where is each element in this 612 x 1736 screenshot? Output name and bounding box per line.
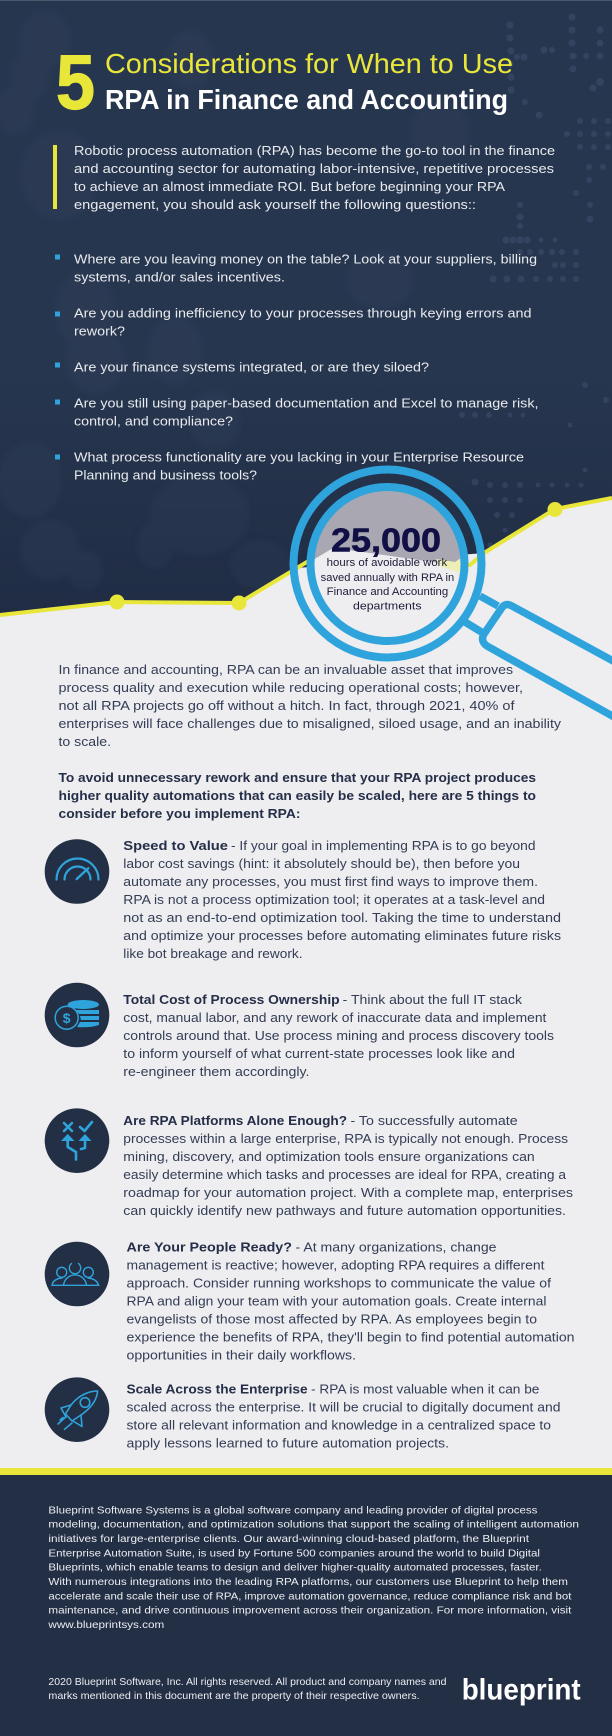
- item 4 text: Are Your People Ready?: [126, 1240, 292, 1255]
- stat caption: [321, 557, 454, 612]
- body paragraph: enterprises will face challenges due to misaligned, siloed usage, and an inability: [58, 716, 561, 731]
- intro paragraph: Robotic process automation (RPA) has become the go-to tool in the finance: [74, 143, 555, 158]
- bold lead-in paragraph: higher quality automations that can easily be scaled, here are 5 things to: [58, 788, 536, 803]
- item 5 text: [126, 1382, 560, 1451]
- intro accent bar: [53, 145, 57, 209]
- company description: Blueprint Software Systems is a global software company and leading provider of digital process: [48, 1504, 537, 1516]
- lens rings: [294, 470, 482, 658]
- item 5 text: apply lessons learned to future automation projects.: [126, 1436, 449, 1451]
- bullet 2: rework?: [74, 323, 125, 338]
- icon: decision arrows: [45, 1108, 109, 1173]
- footer panel: [0, 1468, 612, 1736]
- body paragraph: process quality and execution while reducing operational costs; however,: [58, 680, 523, 695]
- icon: team: [45, 1242, 109, 1306]
- item 2 text: controls around that. Use process mining and process discovery tools: [123, 1028, 554, 1043]
- item 3 text: roadmap for your automation project. With a complete map, enterprises: [123, 1185, 573, 1200]
- stat 25,000: 25,000: [331, 522, 441, 558]
- copyright notice: marks mentioned in this document are the property of their respective owners.: [48, 1690, 420, 1702]
- item 4 text: [126, 1240, 574, 1363]
- bullet 4: Are you still using paper-based documentation and Excel to manage risk,: [74, 395, 538, 410]
- body paragraph: not all RPA projects go off without a hitch. In fact, through 2021, 40% of: [58, 698, 515, 713]
- bullet 1: [55, 251, 537, 284]
- item 4 text: opportunities in their daily workflows.: [126, 1348, 356, 1363]
- item 1 text: automate any processes, you must first find ways to improve them.: [123, 874, 538, 889]
- item 3 text: [123, 1113, 573, 1218]
- bullet 3: Are your finance systems integrated, or are they siloed?: [74, 359, 429, 374]
- dark header background with bokeh: [0, 0, 612, 620]
- copyright notice: [48, 1676, 447, 1702]
- item 4 text: experience the benefits of RPA, they'll begin to find potential automation: [126, 1330, 574, 1345]
- icon: coins: [45, 983, 109, 1047]
- line chart with yellow points: [0, 498, 612, 615]
- company description: modeling, documentation, and optimization solutions that support the scaling of intelligent automation: [48, 1519, 579, 1531]
- item 1 text: Speed to Value: [123, 838, 228, 853]
- blueprint logo: blueprint: [462, 1674, 581, 1706]
- item 4: are your people ready: [45, 1240, 574, 1363]
- footer top stripe: [0, 1468, 612, 1475]
- company description: www.blueprintsys.com: [47, 1619, 165, 1631]
- item 2 text: to inform yourself of what current-state processes look like and: [123, 1046, 515, 1061]
- company description: Blueprints, which enable teams to design and deliver higher-quality automated processes, faster.: [48, 1562, 542, 1574]
- stat caption: hours of avoidable work: [327, 557, 448, 569]
- title numeral 5: 5: [56, 40, 95, 126]
- item 2 text: cost, manual labor, and any rework of inaccurate data and implement: [123, 1010, 547, 1025]
- item 5: scale across the enterprise: [45, 1377, 560, 1451]
- item 1 text: - If your goal in implementing RPA is to go beyond: [231, 838, 536, 853]
- item 1: speed to value: [45, 838, 561, 961]
- magnifying glass callout: [294, 470, 612, 737]
- item 5 text: - RPA is most valuable when it can be: [311, 1382, 539, 1397]
- bullet 4: [55, 395, 538, 428]
- item 3: are RPA platforms alone enough: [45, 1108, 573, 1218]
- item 2 text: re-engineer them accordingly.: [123, 1064, 310, 1079]
- question list: [55, 251, 538, 482]
- bullet 1: Where are you leaving money on the table? Look at your suppliers, billing: [74, 251, 537, 266]
- title line 1: Considerations for When to Use: [105, 48, 513, 79]
- company description: initiatives for large-enterprise clients. Our award-winning cloud-based platform, the Blueprint: [48, 1533, 529, 1545]
- intro paragraph: engagement, you should ask yourself the following questions::: [74, 197, 476, 212]
- item 1 text: and optimize your processes before automating eliminates future risks: [123, 928, 561, 943]
- item 3 text: processes within a large enterprise, RPA is typically not enough. Process: [123, 1131, 568, 1146]
- company description: Enterprise Automation Suite, is used by Fortune 500 companies around the world to build Digital: [48, 1547, 540, 1559]
- item 4 text: approach. Consider running workshops to communicate the value of: [126, 1276, 551, 1291]
- item 2: total cost of process ownership: [45, 983, 554, 1079]
- magnifier handle: [465, 596, 612, 737]
- company description: accelerate and scale their use of RPA, improve automation governance, reduce compliance risk and bot: [48, 1590, 571, 1602]
- lens contents: [313, 490, 470, 640]
- icon: speedometer: [45, 839, 109, 904]
- stat caption: departments: [353, 600, 422, 612]
- item 1 text: [123, 838, 561, 961]
- body paragraph: [58, 662, 561, 749]
- item 1 text: like bot breakage and rework.: [123, 946, 302, 961]
- item 2 text: Total Cost of Process Ownership: [123, 992, 340, 1007]
- company description: With numerous integrations into the leading RPA platforms, our customers use Blueprint to help them: [48, 1576, 568, 1588]
- bullet 5: [55, 449, 524, 482]
- stat caption: saved annually with RPA in: [321, 572, 454, 584]
- company description: maintenance, and drive continuous improvement across their organization. For more information, visit: [48, 1605, 571, 1617]
- item 1 text: not as an end-to-end optimization tool. Taking the time to understand: [123, 910, 561, 925]
- item 1 text: labor cost savings (hint: it absolutely should be), then before you: [123, 856, 520, 871]
- item 4 text: RPA and align your team with your automation goals. Create internal: [126, 1294, 546, 1309]
- item 2 text: - Think about the full IT stack: [343, 992, 522, 1007]
- item 4 text: - At many organizations, change: [296, 1240, 496, 1255]
- item 5 text: scaled across the enterprise. It will be crucial to digitally document and: [126, 1400, 560, 1415]
- copyright notice: 2020 Blueprint Software, Inc. All rights reserved. All product and company names and: [48, 1676, 447, 1688]
- bold lead-in paragraph: consider before you implement RPA:: [58, 806, 300, 821]
- item 3 text: - To successfully automate: [350, 1113, 518, 1128]
- intro paragraph: and accounting sector for automating labor-intensive, repetitive processes: [74, 161, 554, 176]
- item 5 text: store all relevant information and knowledge in a centralized space to: [126, 1418, 551, 1433]
- footer background: [0, 1475, 612, 1736]
- intro paragraph: [74, 143, 555, 212]
- bullet 5: What process functionality are you lacking in your Enterprise Resource: [74, 449, 524, 464]
- icon: coins: $: [63, 1010, 71, 1026]
- item 2 text: [123, 992, 554, 1079]
- bullet 2: Are you adding inefficiency to your processes through keying errors and: [74, 305, 532, 320]
- item 3 text: Are RPA Platforms Alone Enough?: [123, 1113, 347, 1128]
- company description: [47, 1504, 579, 1631]
- item 4 text: evangelists of those most affected by RPA. As employees begin to: [126, 1312, 537, 1327]
- item 5 text: Scale Across the Enterprise: [126, 1382, 308, 1397]
- stat caption: Finance and Accounting: [327, 586, 448, 598]
- item 3 text: mining, discovery, and optimization tools ensure organizations can: [123, 1149, 535, 1164]
- item 4 text: management is reactive; however, adopting RPA requires a different: [126, 1258, 545, 1273]
- title line 2: RPA in Finance and Accounting: [105, 84, 508, 115]
- bold lead-in paragraph: To avoid unnecessary rework and ensure that your RPA project produces: [58, 770, 536, 785]
- bullet 2: [55, 305, 532, 338]
- intro paragraph: to achieve an almost immediate ROI. But before beginning your RPA: [74, 179, 505, 194]
- item 1 text: RPA is not a process optimization tool; it operates at a task-level and: [123, 892, 545, 907]
- bold lead-in paragraph: [58, 770, 536, 821]
- item 3 text: easily determine which tasks and processes are ideal for RPA, creating a: [123, 1167, 567, 1182]
- bullet 5: Planning and business tools?: [74, 467, 257, 482]
- icon: rocket: [45, 1377, 109, 1442]
- body paragraph: In finance and accounting, RPA can be an invaluable asset that improves: [58, 662, 513, 677]
- bullet 1: systems, and/or sales incentives.: [74, 269, 285, 284]
- body paragraph: to scale.: [58, 734, 111, 749]
- bullet 4: control, and compliance?: [74, 413, 233, 428]
- title: [56, 40, 513, 126]
- item 3 text: can quickly identify new pathways and future automation opportunities.: [123, 1203, 566, 1218]
